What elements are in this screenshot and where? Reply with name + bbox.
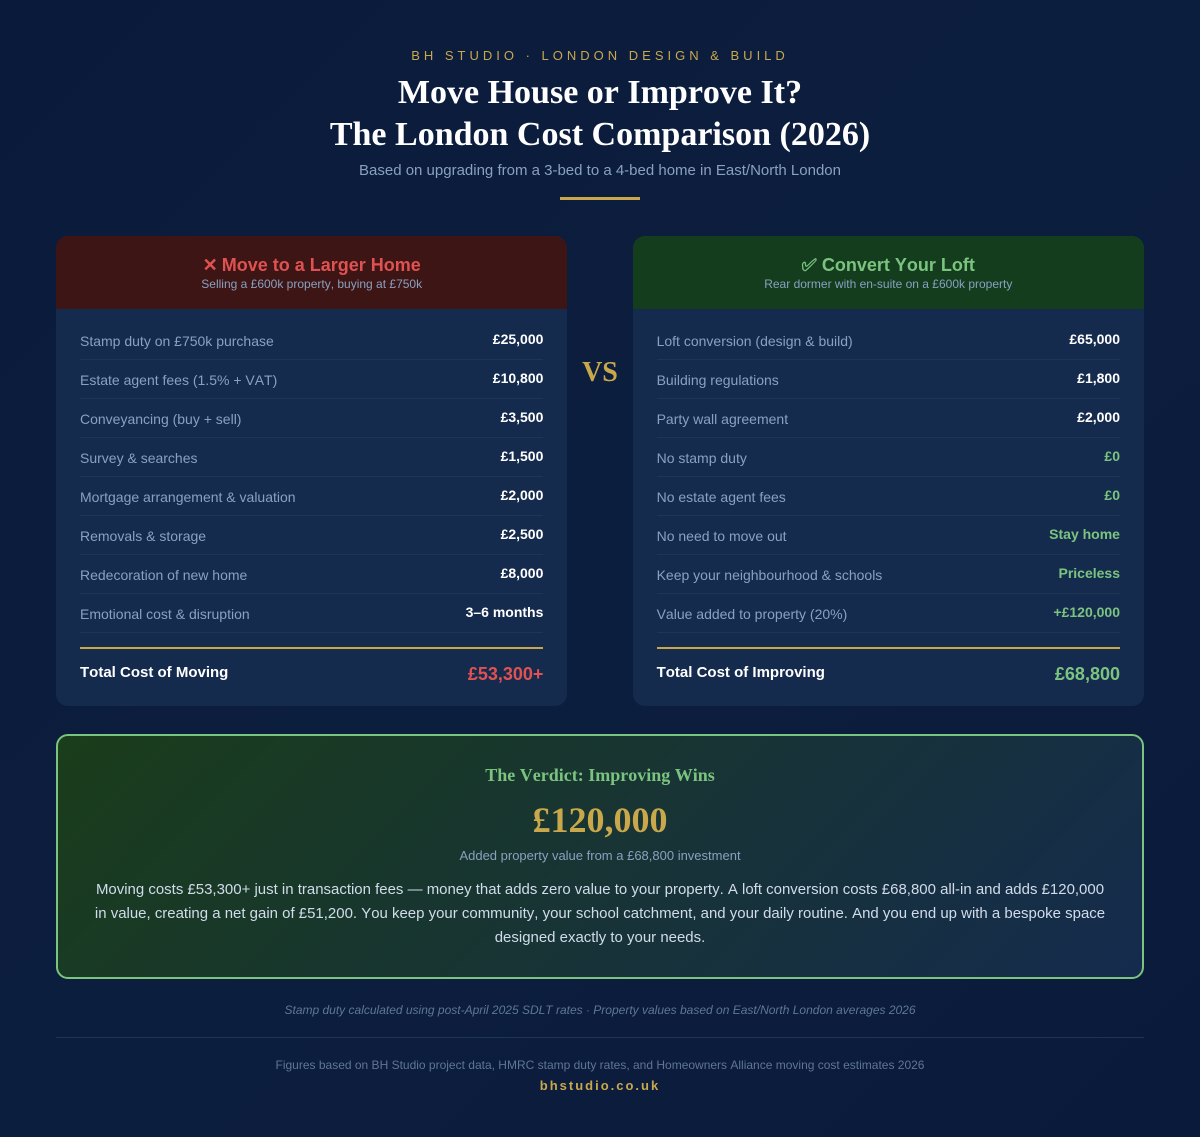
cost row: no stamp duty: No stamp duty: [657, 450, 747, 466]
verdict heading: The Verdict: Improving Wins: [485, 765, 715, 785]
panel header: moving: [56, 236, 567, 309]
verdict amount: £120,000: [532, 800, 668, 840]
cost row: neighbourhood: Priceless: [1058, 565, 1120, 581]
cost row: no agent fees: No estate agent fees: [657, 489, 786, 505]
heading: moving: ✕ Move to a Larger Home: [203, 255, 421, 276]
total value: improving: £68,800: [1055, 664, 1120, 684]
cost row: conveyancing: [80, 399, 543, 438]
cost row: party wall: Party wall agreement: [657, 411, 788, 427]
cost row: emotional cost: Emotional cost & disruption: [80, 606, 250, 622]
cost row: neighbourhood: Keep your neighbourhood & schools: [657, 567, 882, 583]
title: [330, 74, 870, 153]
cost row: mortgage: [80, 477, 543, 516]
cost row: no move: No need to move out: [657, 528, 787, 544]
cost row: mortgage: Mortgage arrangement & valuation: [80, 489, 296, 505]
eyebrow: BH STUDIO · LONDON DESIGN & BUILD: [411, 48, 789, 63]
panel: verdict: [56, 734, 1144, 979]
cost row: stamp duty: [80, 321, 543, 360]
cost row: conveyancing: Conveyancing (buy + sell): [80, 411, 241, 427]
cost row: estate agent: [80, 360, 543, 399]
cost row: emotional cost: [80, 594, 543, 633]
cost row: value added: Value added to property (20%): [657, 606, 847, 622]
cost row: value added: [657, 594, 1120, 633]
cost row: removals: [80, 516, 543, 555]
cost row: emotional cost: 3–6 months: [466, 604, 543, 620]
verdict body text: Moving costs £53,300+ just in transaction fees — money that adds zero value to your property. A loft conversion costs £68,800 all-in and adds £120,000 in value, creating a net gain of £51,200. You keep your community, your school catchment, and your daily routine. And you end up with a bespoke space designed exactly to your needs.: [95, 881, 1105, 946]
cost row: redecoration: [80, 555, 543, 594]
title: The London Cost Comparison (2026): [330, 116, 870, 153]
cost row: loft conversion: £65,000: [1069, 331, 1120, 347]
cost row: stamp duty: £25,000: [493, 331, 543, 347]
footer website: bhstudio.co.uk: [540, 1078, 660, 1093]
cost row: mortgage: £2,000: [501, 487, 543, 503]
cost row: conveyancing: £3,500: [501, 409, 543, 425]
header: [330, 48, 870, 200]
cost row: removals: Removals & storage: [80, 528, 206, 544]
cost row: no agent fees: [657, 477, 1120, 516]
cost row: value added: +£120,000: [1053, 604, 1120, 620]
cost row: stamp duty: Stamp duty on £750k purchase: [80, 333, 274, 349]
panel: convert your loft: [633, 236, 1144, 706]
panel header: loft: [633, 236, 1144, 309]
cost row: survey: Survey & searches: [80, 450, 198, 466]
cost row: loft conversion: [657, 321, 1120, 360]
footnote: Stamp duty calculated using post-April 2025 SDLT rates · Property values based on East/North London averages 2026: [284, 1003, 916, 1017]
subtitle: Based on upgrading from a 3-bed to a 4-bed home in East/North London: [359, 162, 841, 179]
cost row: building regulations: £1,800: [1077, 370, 1120, 386]
total label: moving: Total Cost of Moving: [80, 664, 228, 681]
cost row: loft conversion: Loft conversion (design & build): [657, 333, 853, 349]
cost row: no agent fees: £0: [1104, 487, 1120, 503]
subheading: moving: Selling a £600k property, buying at £750k: [201, 277, 422, 291]
cost row: removals: £2,500: [501, 526, 543, 542]
verdict caption: Added property value from a £68,800 investment: [459, 848, 741, 863]
subheading: loft: Rear dormer with en-suite on a £600k property: [764, 277, 1012, 291]
cost row: no move: [657, 516, 1120, 555]
cost row: party wall: £2,000: [1077, 409, 1120, 425]
total label: improving: Total Cost of Improving: [657, 664, 825, 681]
cost row: no stamp duty: £0: [1104, 448, 1120, 464]
cost row: neighbourhood: [657, 555, 1120, 594]
cost row: redecoration: Redecoration of new home: [80, 567, 247, 583]
cost row: building regulations: [657, 360, 1120, 399]
cost row: redecoration: £8,000: [501, 565, 543, 581]
cost row: survey: £1,500: [501, 448, 543, 464]
panel: move to a larger home: [56, 236, 567, 706]
cost row: party wall: [657, 399, 1120, 438]
cost row: no stamp duty: [657, 438, 1120, 477]
cost row: survey: [80, 438, 543, 477]
title: Move House or Improve It?: [398, 74, 802, 111]
total value: moving: £53,300+: [468, 664, 543, 684]
heading: loft: ✅︎ Convert Your Loft: [802, 255, 975, 276]
cost row: no move: Stay home: [1049, 526, 1120, 542]
gold divider: [560, 197, 640, 200]
cost row: estate agent: £10,800: [493, 370, 543, 386]
vs label: VS: [582, 357, 618, 388]
footer sources: Figures based on BH Studio project data, HMRC stamp duty rates, and Homeowners Alliance moving cost estimates 2026: [276, 1058, 924, 1072]
cost row: estate agent: Estate agent fees (1.5% + VAT): [80, 372, 277, 388]
cost row: building regulations: Building regulations: [657, 372, 779, 388]
